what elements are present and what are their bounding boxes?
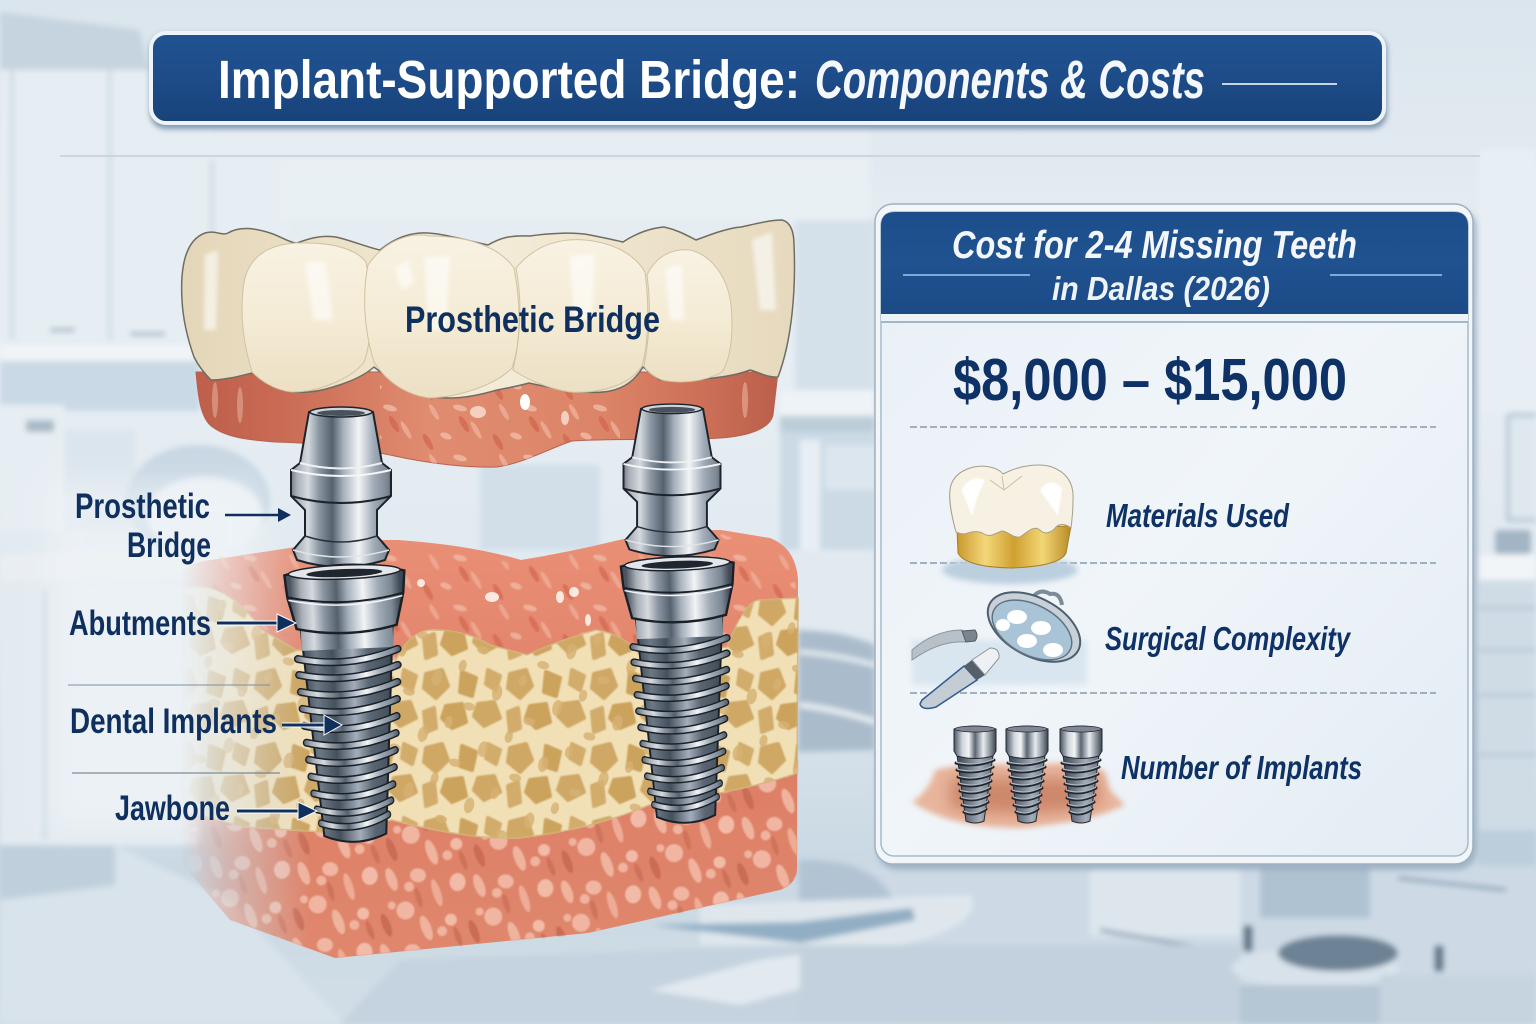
title italic text: Components & Costs: [815, 50, 1205, 110]
gum highlights: [212, 382, 748, 467]
panel header: [881, 212, 1468, 323]
soft glow behind left labels: [50, 480, 260, 830]
left abutment: [291, 407, 391, 567]
text: number of implants: Number of Implants: [1121, 749, 1362, 786]
panel header: in Dallas (2026): [1052, 270, 1270, 307]
label: jawbone: Jawbone: [115, 789, 230, 828]
text: surgical complexity: Surgical Complexity: [1105, 620, 1351, 657]
jawbone: [180, 587, 798, 838]
label: abutments: Abutments: [69, 604, 211, 643]
prosthetic bridge label: Prosthetic Bridge: [405, 299, 660, 340]
prosthetic bridge teeth: [182, 220, 794, 398]
left implant: [284, 562, 416, 844]
title text: Implant-Supported Bridge:: [218, 50, 800, 110]
icon: crown tooth with gold base: [942, 465, 1078, 584]
icon: surgical light and instruments: [912, 578, 1092, 708]
label: prosthetic bridge: Prosthetic: [75, 487, 210, 526]
label: dental implants: Dental Implants: [70, 702, 277, 741]
cost panel: [875, 204, 1477, 870]
right implant: [621, 555, 743, 825]
panel header: Cost for 2-4 Missing Teeth: [952, 224, 1357, 267]
upper gum of prosthetic bridge: [196, 372, 778, 467]
price range: $8,000 – $15,000: [953, 347, 1347, 413]
label: prosthetic bridge: Bridge: [127, 526, 211, 565]
lower gum: [170, 530, 798, 958]
component labels with arrows: [68, 487, 342, 828]
text: materials used: Materials Used: [1106, 497, 1290, 534]
icon: three implants in gum: [912, 726, 1125, 828]
title banner: [150, 33, 1387, 129]
bridge and implant illustration: [170, 220, 798, 958]
jaw cross-section: gum and bone: [170, 530, 798, 958]
right abutment: [624, 404, 720, 556]
label: prosthetic bridge: [75, 487, 291, 565]
